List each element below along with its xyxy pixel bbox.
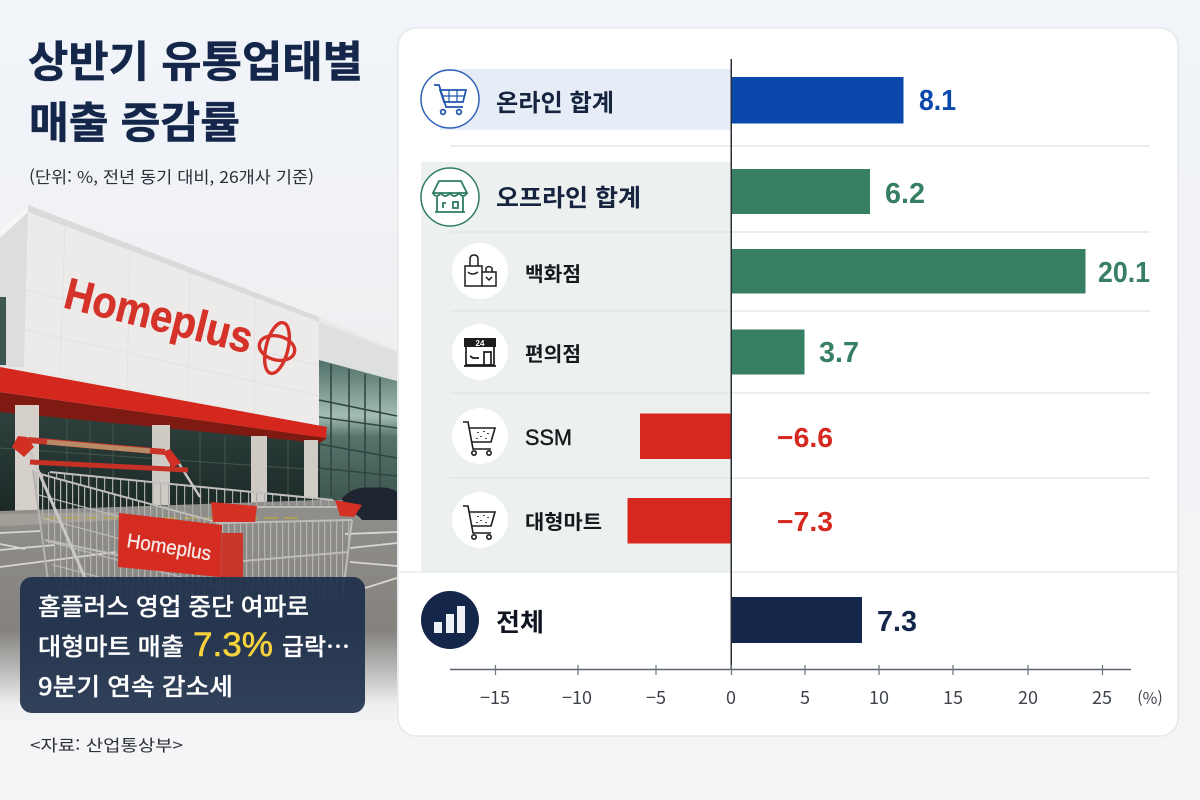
icon: convenience store (452, 324, 508, 380)
bar: convenience store 3.7: 3.7 (819, 337, 859, 369)
bar: convenience store 3.7 (731, 330, 859, 374)
source note: <자료: 산업통상부> (30, 732, 183, 756)
x axis: (%) (1137, 685, 1163, 709)
x axis: 15 (943, 684, 963, 710)
bar: online 8.1: 8.1 (919, 85, 956, 117)
icon: SSM cart (452, 408, 508, 464)
title (28, 28, 363, 151)
bar: offline 6.2: 6.2 (885, 178, 925, 210)
x axis: 20 (1018, 684, 1038, 710)
label: hypermarket: 대형마트 (525, 506, 602, 535)
callout: headline summary: 급락⋯ (282, 627, 350, 662)
label: SSM: SSM (525, 425, 572, 450)
bar: department store 20.1: 20.1 (1098, 257, 1150, 289)
zero axis line (730, 59, 732, 670)
callout: headline summary: 홈플러스 영업 중단 여파로 (38, 587, 309, 622)
car (342, 488, 397, 520)
bar: department store 20.1 (731, 249, 1150, 294)
icon: offline store (421, 168, 479, 226)
bar: total 7.3: 7.3 (877, 606, 917, 638)
bar: offline 6.2 (731, 169, 925, 214)
online row band (440, 69, 731, 130)
x axis: −5 (646, 684, 666, 710)
label: total: 전체 (496, 603, 544, 639)
shopping cart (12, 436, 362, 600)
x axis (450, 665, 1163, 710)
callout: headline summary: 7.3% (193, 626, 273, 664)
bar: hypermarket -7.3: −7.3 (777, 506, 833, 537)
icon: online cart (421, 70, 479, 128)
subtitle: unit note: (단위: %, 전년 동기 대비, 26개사 기준) (29, 164, 314, 188)
bar: hypermarket -7.3 (628, 498, 833, 544)
icon: convenience store: 24 (476, 339, 485, 348)
bar: SSM -6.6 (640, 414, 833, 459)
icon: department store bags (452, 243, 508, 299)
label: convenience store: 편의점 (525, 338, 581, 367)
icon: total chart (421, 591, 479, 649)
callout: headline summary: 대형마트 매출 (38, 627, 184, 662)
label: offline total: 오프라인 합계 (496, 178, 641, 213)
brand sign: Homeplus (60, 269, 258, 363)
label: online total: 온라인 합계 (496, 83, 614, 118)
x axis: 5 (800, 684, 810, 710)
shopping cart: Homeplus (125, 530, 213, 565)
label: department store: 백화점 (525, 258, 581, 287)
offline group band (421, 162, 731, 572)
x axis: 25 (1092, 684, 1112, 710)
x axis: 0 (726, 684, 736, 710)
icon: hypermarket cart (452, 492, 508, 548)
bar: SSM -6.6: −6.6 (777, 422, 833, 453)
photo: Homeplus storefront with shopping cart (0, 205, 400, 730)
panel: chart card (398, 28, 1178, 736)
callout: headline summary: 9분기 연속 감소세 (38, 667, 233, 702)
callout: headline summary (20, 577, 365, 713)
x axis: −15 (480, 684, 510, 710)
title: 매출 증감률 (29, 89, 240, 151)
x axis: 10 (869, 684, 889, 710)
x axis: −10 (562, 684, 592, 710)
bar: total 7.3 (731, 597, 917, 643)
title: 상반기 유통업태별 (28, 28, 363, 90)
bar: online 8.1 (731, 77, 956, 124)
